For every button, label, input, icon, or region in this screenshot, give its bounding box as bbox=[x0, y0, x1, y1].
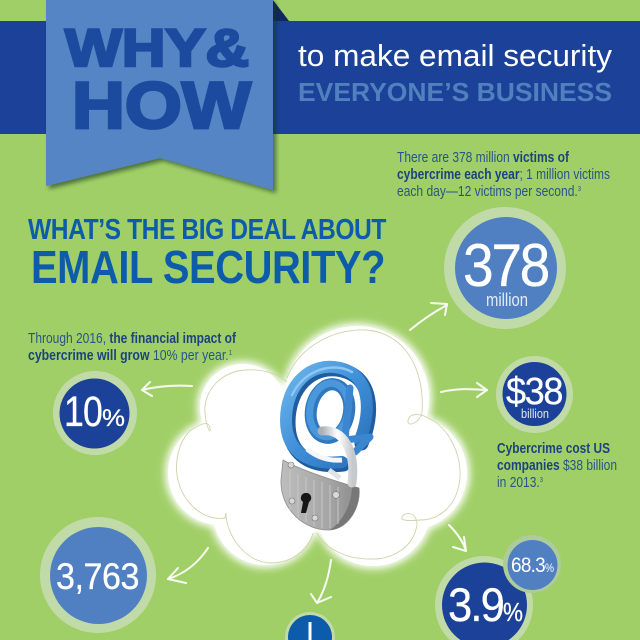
circle: 378 million: million bbox=[486, 290, 528, 310]
header band bbox=[0, 21, 640, 134]
circle: 3,763 bbox=[40, 517, 156, 633]
ribbon with why and how bbox=[46, 0, 273, 190]
heading: how: HOW bbox=[72, 68, 252, 142]
text: 378 million victims: each day—12 victims per second. bbox=[397, 184, 615, 200]
circle: 3,763: 3,763 bbox=[56, 556, 139, 597]
icon: at sign and padlock bbox=[281, 367, 370, 530]
arrow: to exclamation circle bbox=[311, 560, 331, 603]
subtitle: everyone's business: EVERYONE’S BUSINESS bbox=[298, 77, 612, 107]
padlock shackle bbox=[307, 431, 353, 483]
circle: 10%: % bbox=[102, 405, 125, 432]
arrow: to 378 bbox=[410, 303, 447, 330]
circle: 10% bbox=[53, 371, 137, 455]
section heading: email security: EMAIL SECURITY? bbox=[31, 241, 385, 293]
circle: 3.9% bbox=[435, 556, 533, 640]
circle: 3.9%: % bbox=[503, 597, 523, 627]
text: cybercrime cost: Cybercrime cost US bbox=[497, 441, 610, 457]
circle: $38 billion: $38 bbox=[506, 371, 562, 413]
circle: $38 billion bbox=[496, 356, 573, 433]
circle: 10%: 10 bbox=[64, 388, 102, 436]
circle: exclamation bbox=[285, 612, 335, 640]
text: 378 million victims: 3 bbox=[578, 186, 581, 193]
ribbon fold bbox=[273, 0, 289, 21]
text: financial impact: 1 bbox=[229, 350, 232, 357]
text: cybercrime cost: 3 bbox=[540, 477, 543, 484]
heading: why and: WHY& bbox=[65, 19, 249, 78]
arrow: to 3,763 bbox=[168, 548, 208, 583]
arrow: to 3.9% bbox=[449, 525, 466, 551]
text: financial impact: cybercrime will grow 10% per year. bbox=[28, 348, 243, 364]
text: 378 million victims: cybercrime each year; 1 million victims bbox=[397, 167, 610, 183]
circle: $38 billion: billion bbox=[521, 406, 549, 421]
circle: 3.9%: 3.9 bbox=[448, 578, 503, 631]
keyhole bbox=[301, 493, 311, 513]
section heading: WHAT’S THE BIG DEAL ABOUT bbox=[28, 214, 387, 246]
circle: 68.3% bbox=[503, 535, 561, 593]
text: cybercrime cost: companies $38 billion bbox=[497, 458, 617, 474]
cloud bbox=[165, 323, 470, 569]
arrow: to $38 bbox=[441, 383, 487, 397]
text: 378 million victims bbox=[397, 150, 610, 200]
arrow: to 10% bbox=[142, 382, 192, 396]
padlock body bbox=[281, 460, 359, 530]
text: cybercrime cost bbox=[497, 441, 617, 491]
circle: 378 million bbox=[444, 207, 566, 329]
text: financial impact bbox=[28, 331, 236, 364]
circle: 68.3%: 68.3 bbox=[511, 554, 545, 577]
circle: 378 million: 378 bbox=[463, 232, 548, 299]
text: financial impact: Through 2016, the financial impact of bbox=[28, 331, 236, 347]
subtitle: to make email security: to make email security bbox=[298, 38, 612, 73]
section heading bbox=[28, 214, 387, 293]
text: 378 million victims: There are 378 million victims of bbox=[397, 150, 569, 166]
circle: 68.3%: % bbox=[545, 561, 554, 575]
text: cybercrime cost: in 2013. bbox=[497, 475, 549, 491]
at sign bbox=[286, 367, 370, 465]
